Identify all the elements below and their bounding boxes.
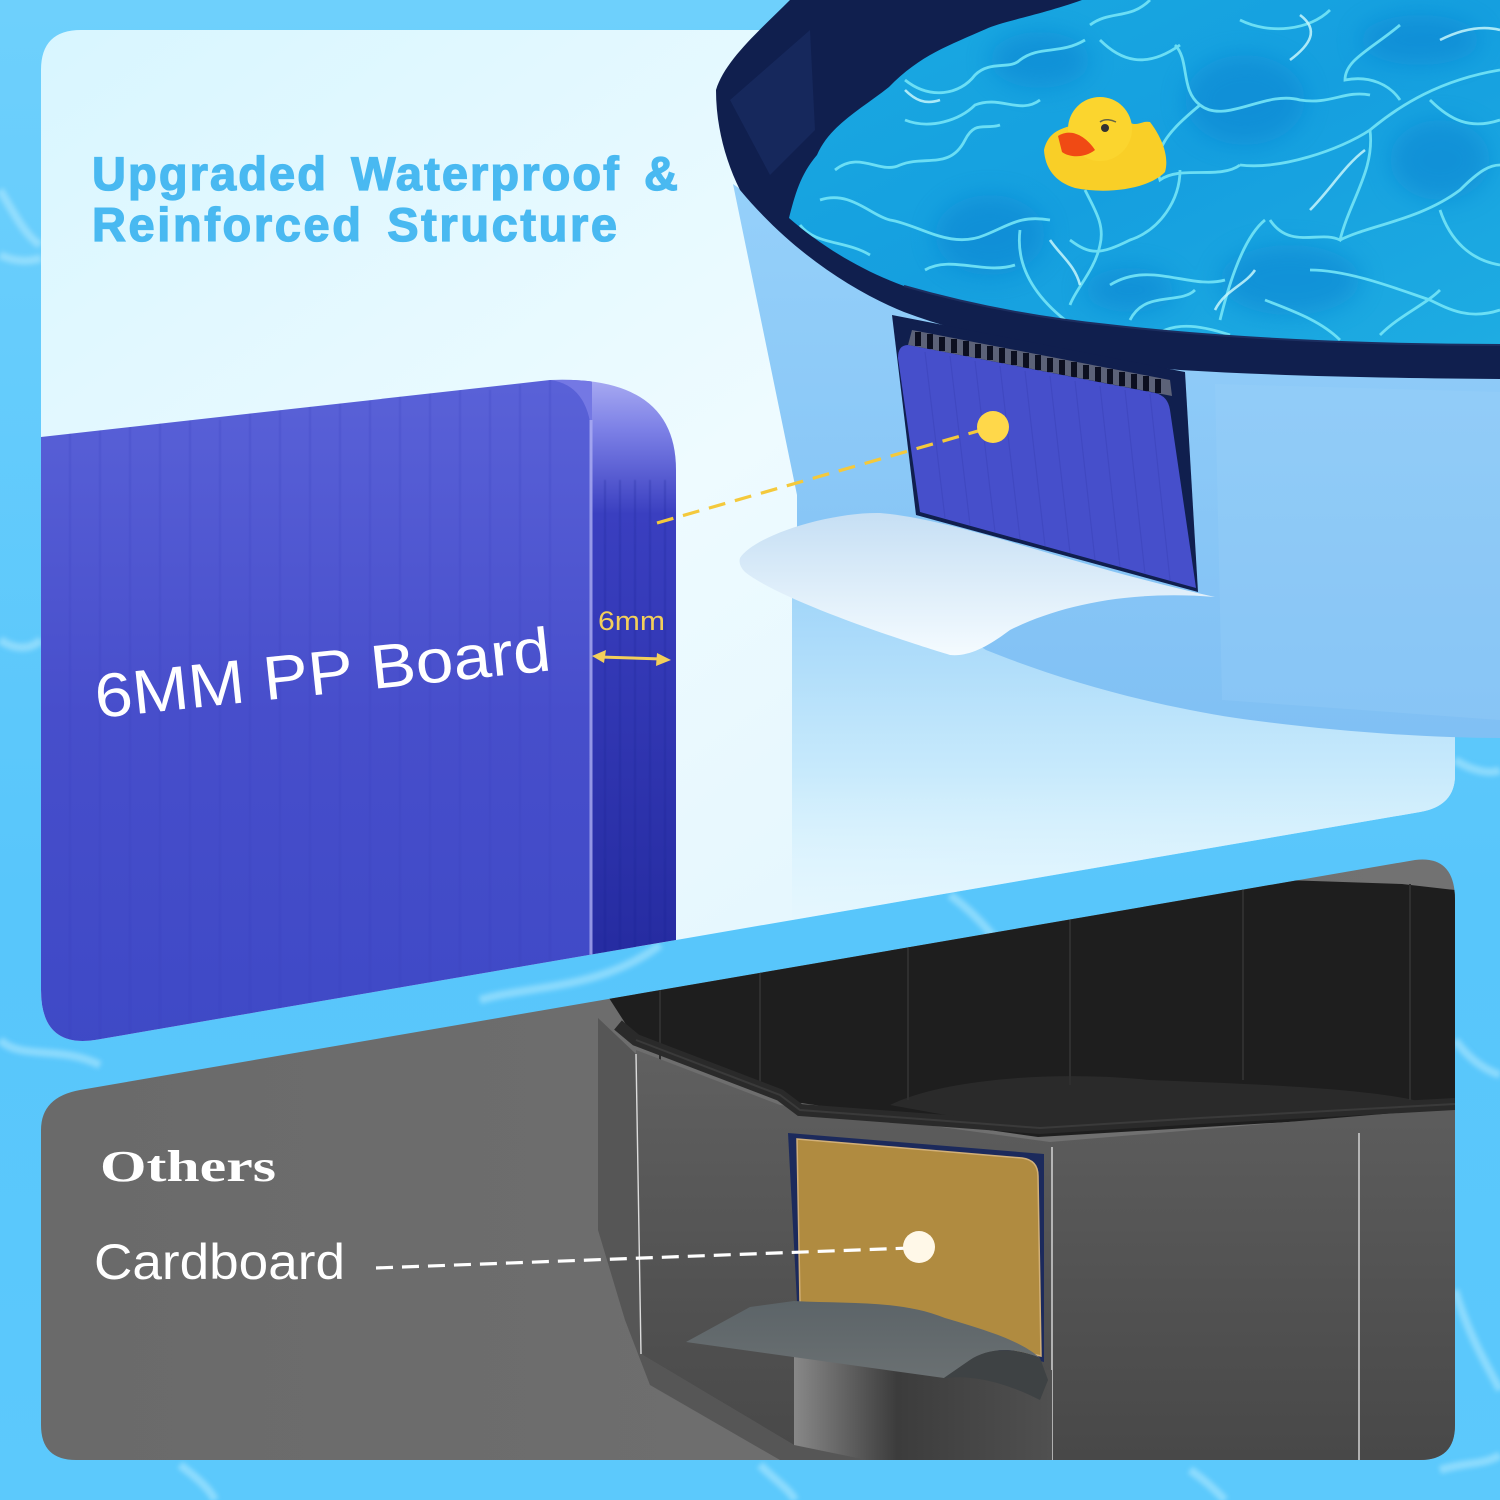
title: Upgraded Waterproof & <box>92 147 678 200</box>
seams <box>636 1054 1359 1460</box>
pool reflection <box>792 597 1455 920</box>
label: 6MM PP Board: 6MM PP Board <box>91 615 554 732</box>
panel: 6mm PP board close-up <box>41 370 676 1060</box>
pool interior <box>609 880 1455 1137</box>
panel: upgraded pool <box>41 30 1455 1041</box>
label: others: Others <box>100 1142 276 1191</box>
thickness dimension: 6mm <box>598 606 665 636</box>
label: cardboard: Cardboard <box>94 1234 345 1290</box>
panel: others <box>41 860 1455 1460</box>
title <box>92 147 678 251</box>
callout: dashed line to yellow dot <box>657 411 1009 523</box>
rim stitching band <box>904 286 1500 345</box>
water <box>780 0 1500 350</box>
pocket with corrugated blue board <box>892 315 1198 592</box>
under flap shadow <box>794 1350 1052 1460</box>
icon: rubber duck <box>1044 97 1166 191</box>
grey pool <box>598 880 1455 1460</box>
title: Reinforced Structure <box>92 198 617 251</box>
pool outer wall <box>636 1050 1455 1460</box>
rim <box>618 1025 1455 1128</box>
flap: white fold <box>740 513 1215 655</box>
flap <box>686 1301 1040 1378</box>
pool inner rim <box>716 0 1500 379</box>
pool: blue pool with duck <box>716 0 1500 738</box>
callout: dashed line to white dot <box>376 1231 935 1268</box>
thickness dimension <box>592 606 671 666</box>
pool wall <box>733 184 1500 738</box>
pool left shadow <box>598 1018 867 1460</box>
pocket <box>788 1133 1044 1362</box>
